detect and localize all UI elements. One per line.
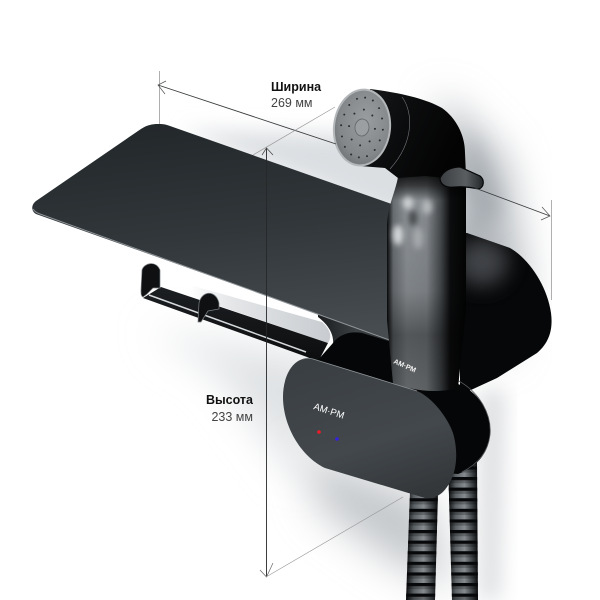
hand shower <box>329 86 483 391</box>
gap under shelf <box>190 285 330 343</box>
head <box>360 89 466 178</box>
hook: right <box>198 293 219 322</box>
arrowhead: right <box>541 207 550 220</box>
label: height: Высота <box>206 393 254 407</box>
towel bar <box>141 264 328 362</box>
arrowhead: bottom <box>260 563 273 577</box>
hose: right <box>448 462 478 600</box>
wall shadows <box>150 95 525 600</box>
label: width <box>271 80 322 110</box>
mount cylinder <box>318 332 490 474</box>
shelf front edge highlight <box>33 209 395 342</box>
label: height <box>206 393 254 424</box>
label: width: 269 мм <box>271 96 313 110</box>
extension line: left <box>158 71 160 124</box>
hook: left <box>141 264 160 297</box>
hot indicator <box>317 430 321 434</box>
wall body <box>456 233 552 395</box>
plate logo: AM·PM <box>312 401 346 422</box>
handle <box>387 170 466 391</box>
width dimension line: right part <box>475 188 550 216</box>
front plate <box>283 358 456 498</box>
arrowhead: top <box>262 148 273 155</box>
spray face <box>329 86 395 169</box>
shelf <box>32 124 400 343</box>
arrowhead: left <box>158 81 166 94</box>
height dimension line <box>266 148 268 577</box>
guide to shower <box>253 107 335 155</box>
cold indicator <box>335 437 339 441</box>
mount rim <box>457 380 490 472</box>
height dimension <box>260 148 403 577</box>
width dimension <box>158 71 552 300</box>
handle logo: AM·PM <box>392 358 417 375</box>
trigger <box>440 167 483 189</box>
head seam <box>390 97 410 169</box>
width dimension line <box>158 85 336 144</box>
label: height: 233 мм <box>211 410 253 424</box>
label: width: Ширина <box>271 80 322 94</box>
bar <box>143 287 328 362</box>
plate rim <box>303 358 417 391</box>
bar highlight <box>149 295 306 352</box>
hose: left <box>406 492 438 600</box>
shelf bracket <box>318 312 395 350</box>
extension line: right <box>550 200 552 300</box>
guide to plate <box>266 497 403 577</box>
hoses <box>406 462 478 600</box>
